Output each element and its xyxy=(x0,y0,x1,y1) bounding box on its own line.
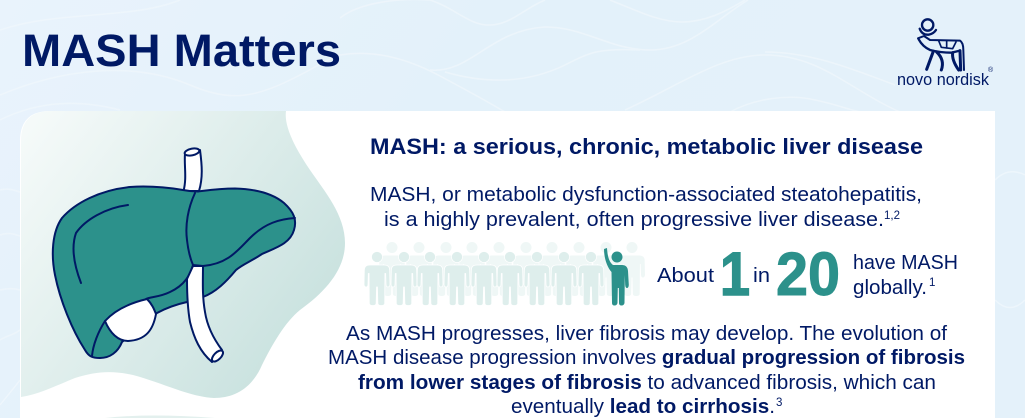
surface crease xyxy=(73,205,128,283)
globally: globally. xyxy=(853,277,927,299)
have MASH: have MASH xyxy=(853,252,958,274)
front row of people xyxy=(364,252,604,306)
next panel top edge xyxy=(105,416,215,418)
title: MASH Matters xyxy=(22,25,341,76)
panel: gradient blob xyxy=(21,111,345,398)
registered mark: ® xyxy=(988,66,994,74)
upper vessel xyxy=(184,150,202,191)
paragraph line 1: As MASH progresses, liver fibrosis may develop. The evolution of xyxy=(346,323,947,345)
lobe line xyxy=(92,321,105,356)
intro line 1: MASH, or metabolic dysfunction-associated steatohepatitis, xyxy=(370,184,922,206)
big number 20: 20 xyxy=(776,240,840,308)
pictogram: 1 in 20 people xyxy=(364,242,645,306)
stat: 1 in 20 have MASH globally xyxy=(657,240,958,308)
body paragraph xyxy=(328,323,965,418)
paragraph line 2: MASH disease progression involves gradual progression of fibrosis xyxy=(328,347,965,369)
back row of people xyxy=(379,242,645,296)
intro text xyxy=(370,184,922,231)
citation 3: 3 xyxy=(776,397,782,409)
citation 1,2: 1,2 xyxy=(884,210,900,222)
icon: apis bull xyxy=(918,19,964,70)
logo: novo nordisk xyxy=(897,19,994,89)
lower vessel xyxy=(187,266,222,362)
paragraph line 4: eventually lead to cirrhosis . xyxy=(511,396,775,418)
paragraph line 3: from lower stages of fibrosis to advanced fibrosis, which can xyxy=(358,372,936,394)
highlighted person with raised arm xyxy=(604,248,629,306)
About: About xyxy=(657,265,714,287)
panel: white content card xyxy=(20,111,995,418)
heading: MASH: a serious, chronic, metabolic liver disease xyxy=(370,134,923,159)
big number 1: 1 xyxy=(720,240,750,308)
logo wordmark: novo nordisk xyxy=(897,70,989,89)
intro line 2: is a highly prevalent, often progressive liver disease. xyxy=(384,209,884,231)
icon: liver illustration xyxy=(53,147,295,363)
citation 1: 1 xyxy=(929,277,935,289)
right lobe underside xyxy=(193,218,295,266)
liver body xyxy=(53,187,295,358)
in: in xyxy=(753,265,770,287)
lobe divider xyxy=(146,193,195,299)
gallbladder xyxy=(105,299,156,341)
